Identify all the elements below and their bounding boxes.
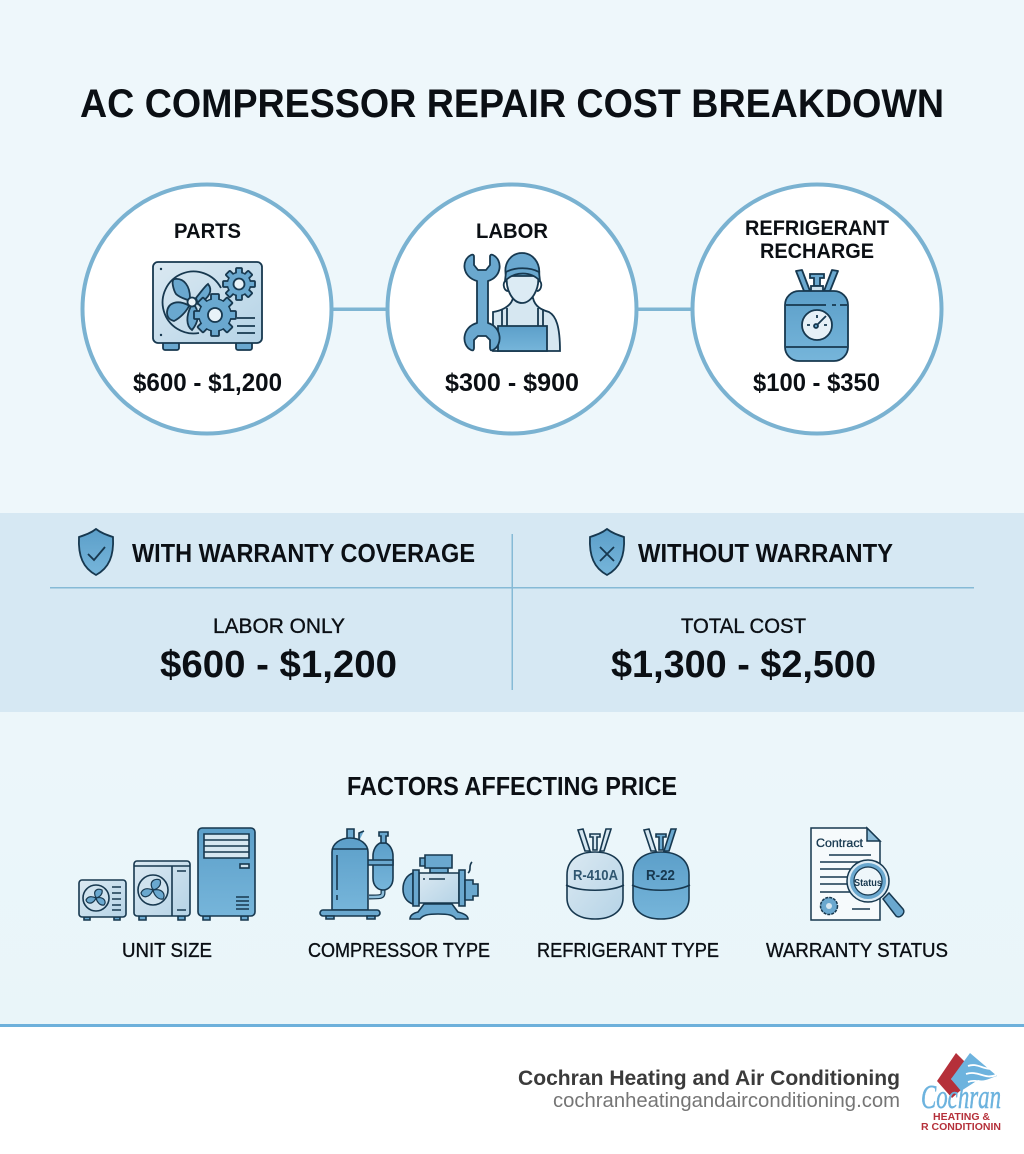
price: refrigerant: $100 - $350 [753, 369, 880, 397]
heading: parts: PARTS [174, 219, 241, 243]
website: cochranheatingandairconditioning.com [553, 1090, 900, 1112]
icon: R-410A tank [566, 829, 624, 919]
footer [0, 1024, 1024, 1154]
panel: warranty comparison [0, 513, 1024, 712]
panel: labor [388, 184, 636, 434]
label: total cost: TOTAL COST [681, 615, 806, 638]
logo: HEATING & [933, 1112, 990, 1123]
label: warranty status: WARRANTY STATUS [766, 940, 948, 962]
icon: outdoor unit with gears [153, 262, 262, 350]
icon: contract with magnifier: Status [854, 878, 882, 889]
heading: with warranty: WITH WARRANTY COVERAGE [132, 538, 475, 568]
heading: without warranty: WITHOUT WARRANTY [638, 538, 893, 568]
heading: labor: LABOR [476, 219, 548, 243]
price: with warranty: $600 - $1,200 [160, 644, 397, 686]
factor: unit size [79, 828, 255, 962]
label: refrigerant type: REFRIGERANT TYPE [537, 940, 719, 962]
label: labor only: LABOR ONLY [213, 615, 345, 638]
title: AC COMPRESSOR REPAIR COST BREAKDOWN [80, 82, 944, 126]
icon: shield with x [590, 529, 624, 575]
icon: contract with magnifier [811, 828, 904, 920]
label: compressor type: COMPRESSOR TYPE [308, 940, 490, 962]
icon: compressors [320, 829, 478, 919]
icon: refrigerant tank with gauge [785, 270, 848, 361]
icon: contract with magnifier: Contract [816, 838, 864, 850]
factor: refrigerant type [537, 829, 719, 962]
icon: technician with wrench [464, 253, 560, 351]
panel: parts [82, 184, 332, 434]
connector: labor to refrigerant [635, 308, 695, 311]
factor: compressor type [308, 829, 490, 962]
heading: refrigerant recharge: REFRIGERANT [745, 216, 889, 240]
icon: R-22 tank: R-22 [646, 868, 675, 884]
icon: three AC units [79, 828, 255, 920]
icon: R-22 tank [632, 829, 690, 919]
factor: warranty status [766, 828, 948, 962]
price: without warranty: $1,300 - $2,500 [611, 644, 876, 686]
connector: parts to labor [330, 308, 390, 311]
company name: Cochran Heating and Air Conditioning [518, 1066, 900, 1090]
icon: shield with check [79, 529, 113, 575]
heading: factors affecting price: FACTORS AFFECTING PRICE [347, 771, 677, 801]
label: unit size: UNIT SIZE [122, 940, 212, 962]
logo [921, 1053, 1001, 1133]
price: labor: $300 - $900 [445, 369, 579, 397]
price: parts: $600 - $1,200 [133, 369, 282, 397]
icon: R-410A tank: R-410A [573, 868, 618, 884]
heading line two: RECHARGE [760, 239, 874, 263]
logo: R CONDITIONIN [921, 1122, 1001, 1133]
panel: refrigerant recharge [692, 184, 942, 434]
